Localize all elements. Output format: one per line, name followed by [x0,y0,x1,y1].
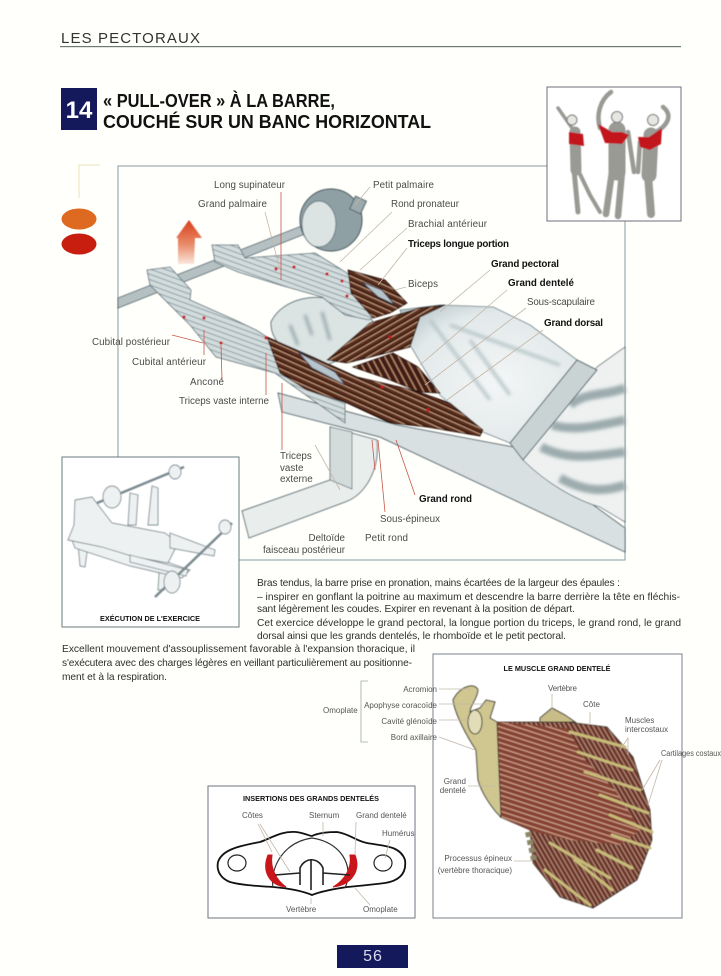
exercise number badge [61,88,97,130]
muscle labels: Brachial antérieur [408,219,488,230]
panel: le muscle grand dentele: Muscles [625,716,654,725]
serratus leader lines [439,689,662,861]
muscle labels: Triceps [280,451,312,462]
title: COUCHÉ SUR UN BANC HORIZONTAL [103,111,431,132]
running header: LES PECTORAUX [61,30,200,47]
panel: insertions des grands denteles: INSERTIONS DES GRANDS DENTELÉS [243,794,379,803]
muscle labels: Grand pectoral [491,259,559,270]
advice paragraph: Excellent mouvement d'assouplissement favorable à l'expansion thoracique, il [62,644,415,655]
muscle labels: Grand dentelé [508,278,575,289]
bench [72,540,190,578]
muscle colour legend ovals [62,165,100,254]
red muscle markers [182,265,430,412]
muscle labels: Cubital antérieur [132,357,207,368]
panel: le muscle grand dentele [433,654,682,918]
panel: insertions des grands denteles: Humérus [382,829,414,838]
muscle labels: Biceps [408,279,438,290]
description paragraph [257,578,681,642]
panel: le muscle grand dentele: Vertèbre [548,684,578,693]
muscle labels: Triceps vaste interne [179,396,270,407]
lower arm [147,267,345,423]
bench leg and foot [242,427,377,538]
trousers [523,347,625,522]
description paragraph: – inspirer en gonflant la poitrine au maximum et descendre la barre derrière la tête en fléchis- [257,592,680,603]
muscle labels: Deltoïde [308,533,346,544]
muscle labels [92,180,603,556]
athlete arms [128,486,215,576]
top plates [103,486,121,508]
red serratus right [333,855,357,887]
bench leg front face [330,427,352,489]
red serratus left [266,855,286,887]
omoplate callout [323,681,438,742]
glenoid cavity [468,710,482,734]
title [103,90,431,132]
panel: insertions des grands denteles: Grand dentelé [356,811,407,820]
torso shading [430,320,560,400]
panel: le muscle grand dentele: Grand [444,777,466,786]
panel: le muscle grand dentele: LE MUSCLE GRAND DENTELÉ [504,664,610,673]
athlete body [68,497,178,563]
muscle labels: Petit palmaire [373,180,435,191]
lower barbell position [155,523,232,597]
muscle labels: externe [280,474,313,485]
muscle labels: faisceau postérieur [263,545,346,556]
panel: insertions des grands denteles: Omoplate [363,905,398,914]
muscle labels: Cubital postérieur [92,337,171,348]
muscle labels: Rond pronateur [391,199,460,210]
advice paragraph: ment et à la respiration. [62,672,167,683]
effort arrow [176,220,202,264]
ribs [545,732,652,905]
omoplate callout: Omoplate [323,706,358,715]
advice paragraph [62,644,415,683]
muscle labels: Triceps longue portion [408,239,509,250]
bench legs [78,543,168,590]
panel: le muscle grand dentele: intercostaux [625,725,668,734]
panel: insertions des grands denteles [208,786,415,918]
omoplate callout: Bord axillaire [391,733,438,742]
top barbell position [97,467,184,503]
triceps and grand dorsal muscle [267,337,483,436]
description paragraph: dorsal ainsi que les grands dentelés, le rhomboïde et le petit pectoral. [257,631,566,642]
figure: side view [558,108,600,212]
figure: back view [638,107,668,214]
panel: insertions des grands denteles: Vertèbre [286,905,317,914]
page number: 56 [363,948,383,965]
leader lines [172,187,543,512]
grand dentele muscle [353,353,440,393]
muscle labels: Grand palmaire [198,199,268,210]
humerus heads [228,855,246,871]
body cross-section [218,832,405,895]
panel: insertions des grands denteles: Sternum [309,811,340,820]
insertion leader lines [258,822,390,905]
head [271,297,373,365]
upper triceps muscle [348,270,407,318]
muscle labels: Anconé [190,377,225,388]
omoplate callout: Apophyse coracoïde [364,701,438,710]
omoplate callout: Cavité glénoïde [381,717,438,726]
lower plates [164,571,180,593]
main illustration frame [118,166,625,560]
belt [510,360,597,460]
omoplate callout: Acromion [403,685,437,694]
bench [278,393,625,552]
serratus fan [497,722,640,845]
triceps tendon highlight [298,352,345,385]
panel: le muscle grand dentele: dentelé [440,786,467,795]
rib arc [273,838,348,888]
muscle labels: Sous-scapulaire [527,297,596,308]
trouser stripes [541,388,625,490]
muscle labels: Long supinateur [214,180,286,191]
inset: exercise execution: EXÉCUTION DE L'EXERCICE [100,614,200,623]
muscle labels: vaste [280,463,304,474]
barbell [118,189,366,308]
exercise number badge: 14 [66,97,93,124]
muscle labels: Sous-épineux [380,514,440,525]
page number [337,945,408,968]
figure: front view [598,92,634,216]
panel: le muscle grand dentele: (vertèbre thoracique) [438,866,512,875]
description paragraph: Cet exercice développe le grand pectoral, la longue portion du triceps, le grand rond, le grand [257,618,681,629]
panel: le muscle grand dentele: Côte [583,700,600,709]
face shading [290,312,330,345]
vertebra [540,708,575,722]
spinous processes [528,832,534,860]
inset: exercise execution [62,457,239,627]
description paragraph: sant légèrement les coudes. Expirer en revenant à la position de départ. [257,604,575,615]
torso [400,305,577,443]
muscle labels: Grand dorsal [544,318,603,329]
muscle labels: Grand rond [419,494,472,505]
description paragraph: Bras tendus, la barre prise en pronation, mains écartées de la largeur des épaules : [257,578,620,589]
thumbnail: muscles worked [547,87,681,221]
title: « PULL-OVER » À LA BARRE, [103,90,335,111]
grand pectoral muscle [327,305,445,363]
panel: insertions des grands denteles: Côtes [242,811,263,820]
panel: le muscle grand dentele: Processus épineux [444,854,512,863]
advice paragraph: s'exécutera avec des charges légères en veillant particulièrement au positionne- [62,658,412,669]
main illustration: pull-over on bench [118,189,625,552]
muscle labels: Petit rond [365,533,408,544]
spine [275,860,350,890]
upper triceps tendon [362,282,395,305]
upper arm [212,245,375,320]
scapula [453,686,501,817]
rib cage [497,722,652,908]
